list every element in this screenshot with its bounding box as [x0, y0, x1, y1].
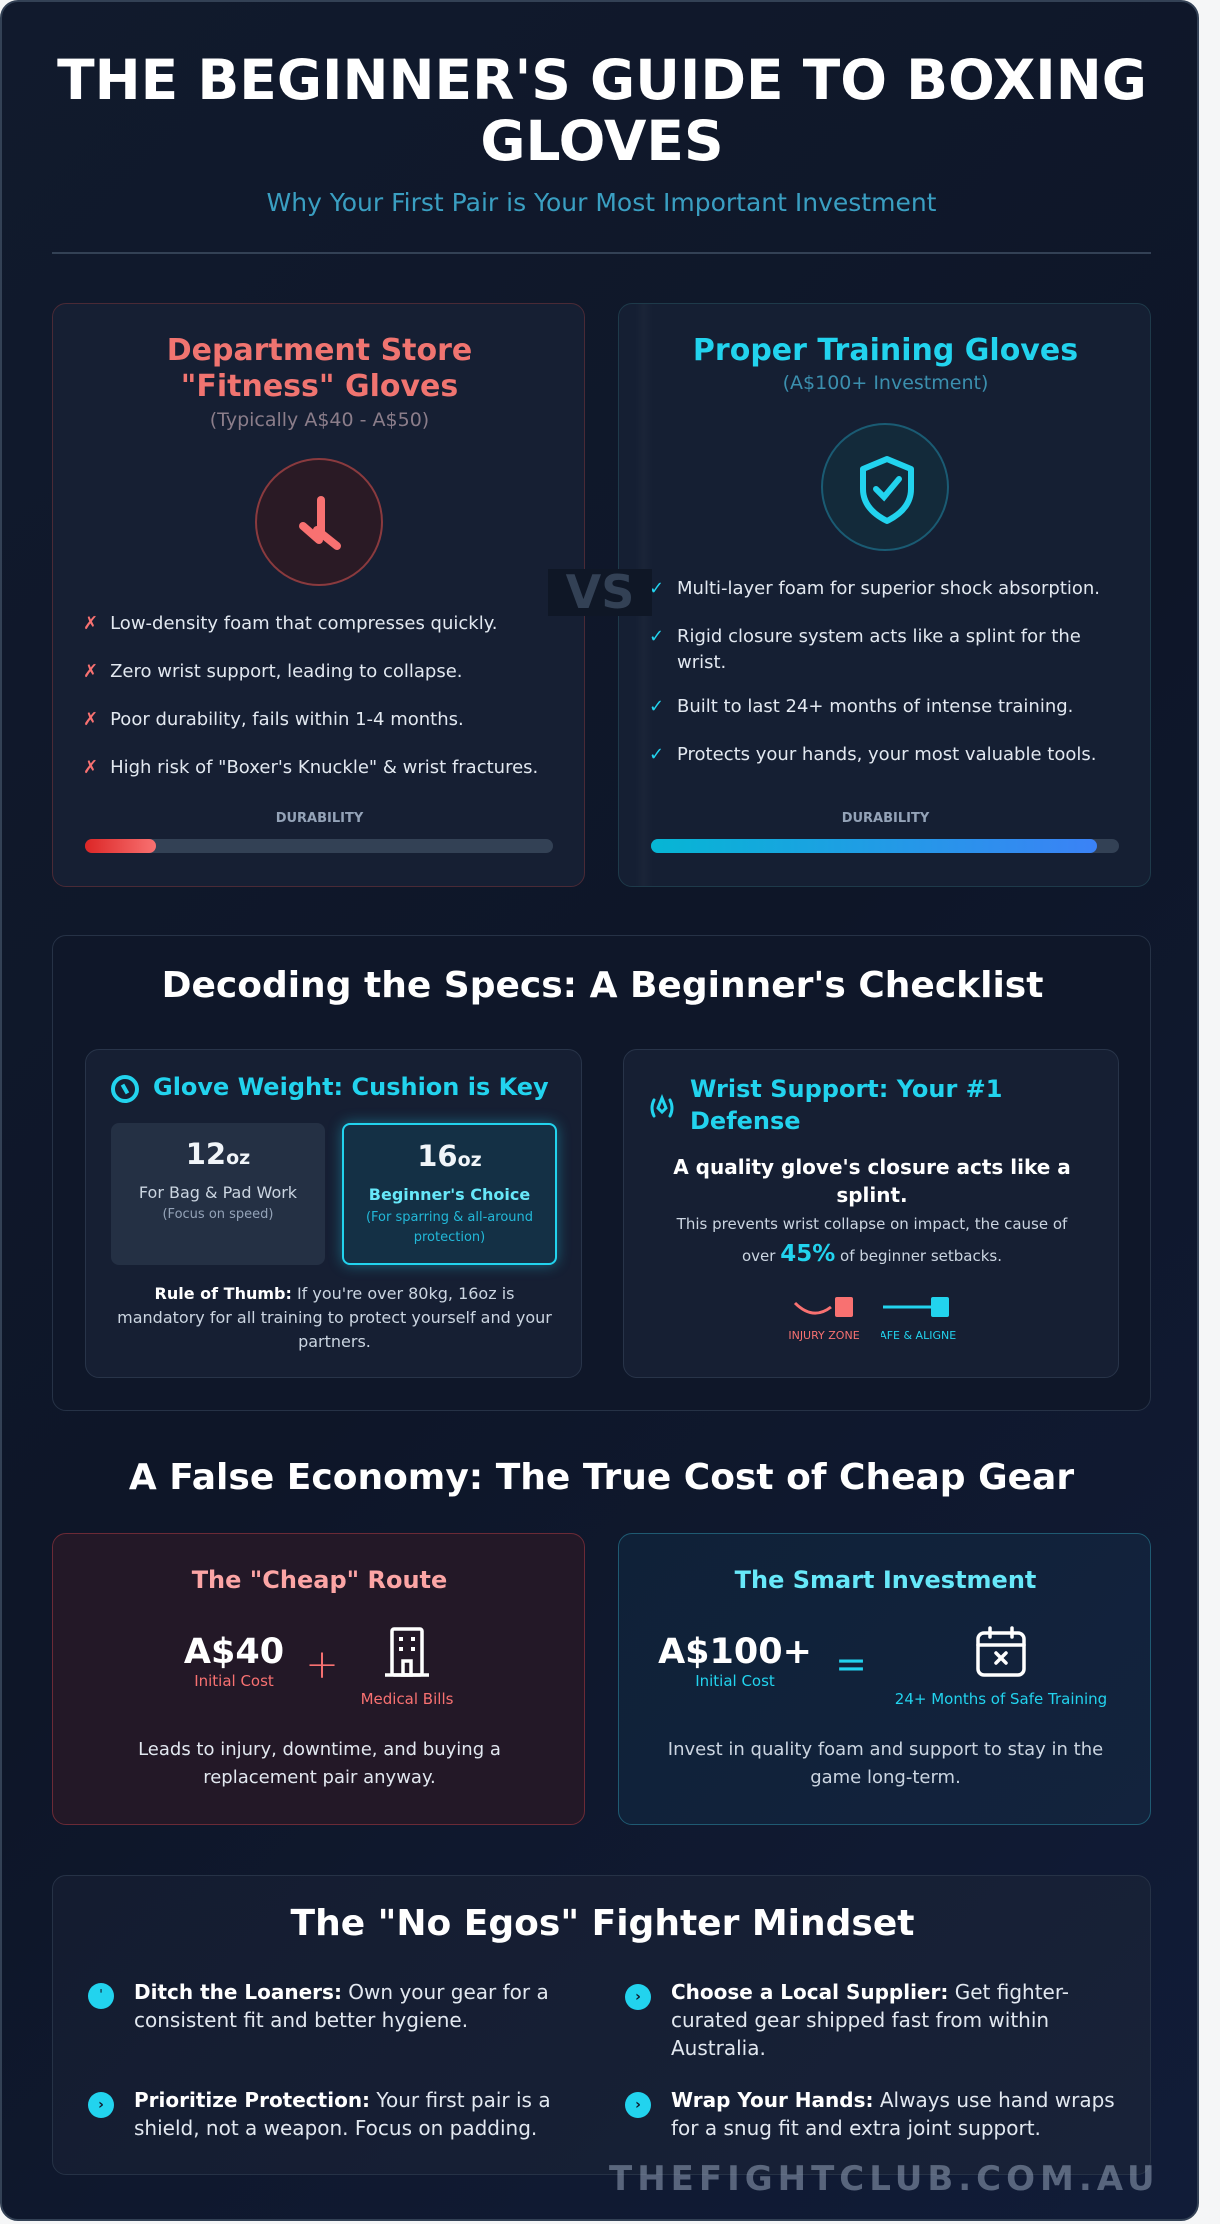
durability label: DURABILITY — [842, 811, 929, 826]
cost: A$100+: Initial Cost — [695, 1672, 775, 1690]
option: 12oz: For Bag & Pad Work — [139, 1183, 297, 1202]
price note: (Typically A$40 - A$50) — [210, 409, 429, 431]
panel: decoding the specs — [52, 935, 1151, 1411]
cost: A$40: A$40 — [184, 1632, 284, 1672]
panel: proper training gloves: ✓ — [649, 744, 664, 765]
list: cons — [83, 613, 538, 778]
heading: smart investment: The Smart Investment — [735, 1566, 1036, 1594]
label: medical bills: Medical Bills — [361, 1690, 453, 1708]
option: 16oz: Beginner's Choice — [369, 1185, 530, 1204]
cost: A$40: Initial Cost — [194, 1672, 274, 1690]
description: Invest in quality foam and support to stay in the game long-term. — [668, 1739, 1103, 1788]
panel: proper training gloves: Multi-layer foam for superior shock absorption. — [677, 578, 1100, 599]
option: 12oz: (Focus on speed) — [162, 1207, 274, 1222]
text: splint: A quality glove's closure acts like a splint. — [673, 1155, 1071, 1207]
heading: glove weight: Glove Weight: Cushion is Key — [153, 1073, 549, 1101]
heading: cheap route: The "Cheap" Route — [192, 1566, 447, 1594]
price note: (A$100+ Investment) — [783, 372, 988, 394]
list: pros — [649, 578, 1100, 765]
diagram: injury zone — [788, 1297, 860, 1342]
panel: department store gloves: ✗ High risk of "Boxer's Knuckle" & wrist fractures. — [83, 757, 538, 778]
tip: ditch the loaners: ' — [99, 1988, 103, 2003]
option: 12oz — [111, 1123, 325, 1265]
description: Leads to injury, downtime, and buying a replacement pair anyway. — [138, 1739, 501, 1788]
heading: wrist support: Wrist Support: Your #1 Defense — [690, 1075, 1002, 1135]
heading: department store: Department Store — [167, 333, 472, 368]
heading: mindset: The "No Egos" Fighter Mindset — [291, 1903, 914, 1944]
durability bar low — [85, 839, 553, 853]
panel: proper training gloves — [618, 303, 1151, 887]
icon: broken wrist — [255, 458, 383, 586]
panel: no egos mindset — [52, 1875, 1151, 2175]
icon: calendar — [976, 1626, 1026, 1677]
icon: plus: + — [305, 1642, 339, 1688]
panel: proper training gloves: Built to last 24+ months of intense training. — [677, 696, 1073, 717]
panel: department store gloves: ✗ Poor durability, fails within 1-4 months. — [83, 709, 464, 730]
cost: A$100+ — [658, 1632, 812, 1690]
panel: proper training gloves: ✓ — [649, 578, 664, 599]
option: 16oz — [342, 1123, 557, 1265]
panel: proper training gloves: ✓ — [649, 626, 664, 647]
diagram: injury zone: INJURY ZONE — [788, 1329, 860, 1342]
panel: proper training gloves: Protects your hands, your most valuable tools. — [677, 744, 1096, 765]
icon: gauge — [111, 1075, 139, 1103]
heading: department store: "Fitness" Gloves — [181, 369, 458, 404]
VS badge: VS — [566, 565, 634, 619]
tip: local supplier: Choose a Local Supplier: Get fighter-curated gear shipped fast from within Australia. — [671, 1980, 1069, 2060]
panel: proper training gloves: Rigid closure system acts like a splint for the wrist. — [677, 626, 1081, 673]
subtitle: Why Your First Pair is Your Most Important Investment — [266, 188, 936, 217]
option: 16oz: 16oz — [417, 1139, 482, 1173]
tip: wrap your hands: › — [635, 2097, 641, 2113]
diagram: safe & aligned — [881, 1297, 956, 1342]
option: 16oz: (For sparring & all-around protection) — [366, 1210, 533, 1245]
panel: cheap route — [52, 1533, 585, 1825]
footer brand: THEFIGHTCLUB.COM.AU — [609, 2159, 1160, 2199]
heading: checklist: Decoding the Specs: A Beginner's Checklist — [162, 965, 1043, 1006]
label: 24+ months: 24+ Months of Safe Training — [895, 1690, 1107, 1708]
panel: department store gloves: ✗ Zero wrist support, leading to collapse. — [83, 661, 462, 682]
card: glove weight — [85, 1049, 582, 1378]
title: THE BEGINNER'S GUIDE TO BOXING GLOVES — [57, 48, 1147, 173]
panel: smart investment — [618, 1533, 1151, 1825]
tip: local supplier: › — [635, 1989, 641, 2005]
icon: wrist — [650, 1094, 674, 1118]
tip: ditch the loaners: Ditch the Loaners: Own your gear for a consistent fit and better hygiene. — [134, 1980, 549, 2032]
heading: false economy: A False Economy: The True Cost of Cheap Gear — [129, 1457, 1074, 1498]
heading: department store — [167, 333, 472, 404]
heading: proper gloves: Proper Training Gloves — [693, 333, 1078, 368]
panel: proper training gloves: ✓ — [649, 696, 664, 717]
tip: wrap your hands: Wrap Your Hands: Always use hand wraps for a snug fit and extra joint support. — [671, 2088, 1115, 2140]
durability bar high — [651, 839, 1119, 853]
VS badge — [548, 569, 652, 616]
tip: prioritize protection: Prioritize Protection: Your first pair is a shield, not a weapon. Focus on padding. — [134, 2088, 551, 2140]
option: 12oz: 12oz — [186, 1137, 250, 1171]
icon: shield — [821, 423, 949, 551]
panel: department store gloves — [52, 303, 585, 887]
cost: A$40 — [184, 1632, 284, 1690]
icon: hospital — [385, 1627, 429, 1677]
durability label: DURABILITY — [276, 811, 363, 826]
panel: department store gloves: ✗ Low-density foam that compresses quickly. — [83, 613, 498, 634]
card: wrist support — [623, 1049, 1119, 1378]
tip: prioritize protection: › — [98, 2097, 104, 2113]
cost: A$100+: A$100+ — [658, 1632, 812, 1672]
rule of thumb: Rule of Thumb: If you're over 80kg, 16oz is mandatory for all training to protect yourself and your partners. — [117, 1284, 552, 1351]
text: 45% stat: This prevents wrist collapse on impact, the cause of over 45% of beginner setbacks. — [677, 1215, 1067, 1267]
icon: equals: = — [835, 1642, 867, 1686]
